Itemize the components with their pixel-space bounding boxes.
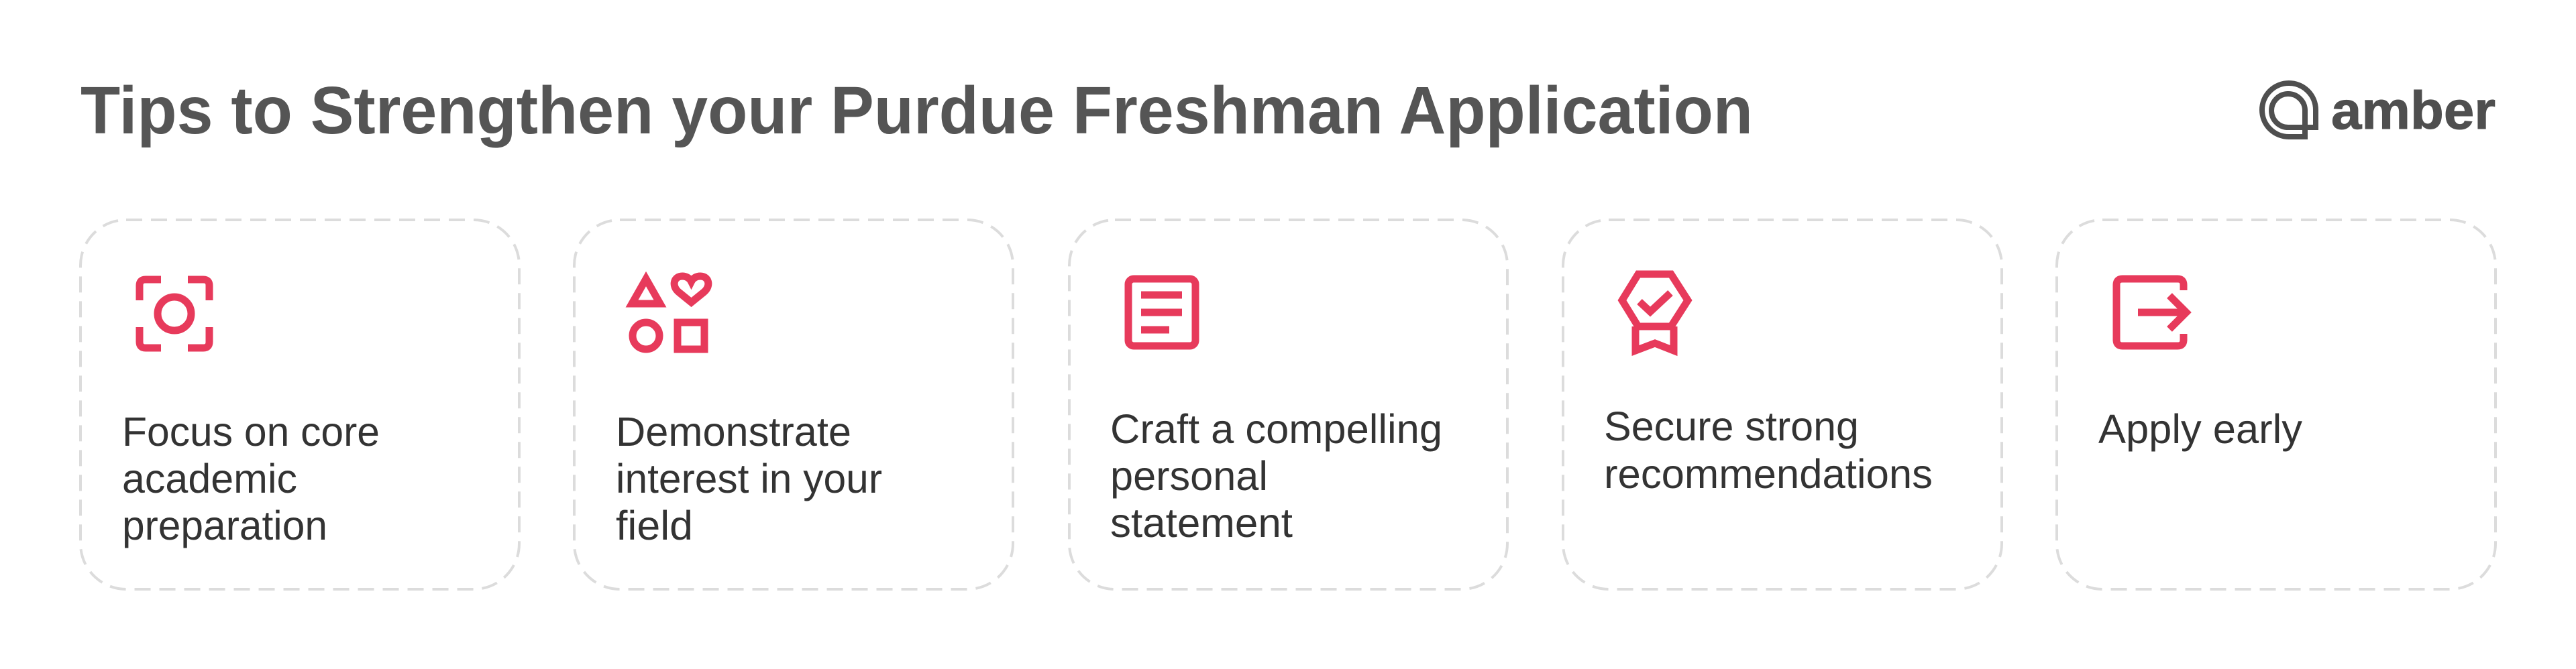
card text: recommendations: [1604, 451, 1933, 497]
card text: Secure strong: [1604, 404, 1859, 449]
icon: award ribbon: [1622, 274, 1688, 351]
card text: preparation: [122, 503, 327, 548]
panel: craft a compelling personal statement: [1069, 220, 1507, 589]
card text: Focus on core: [122, 409, 380, 454]
logo wordmark: amber: [2331, 80, 2496, 140]
icon: focus frame: [140, 280, 209, 348]
icon: document: [1128, 279, 1195, 346]
card text: Demonstrate: [616, 409, 851, 454]
icon: exit arrow: [2116, 279, 2186, 346]
card text: [1604, 404, 1933, 497]
card text: [122, 409, 380, 548]
card text: field: [616, 503, 693, 548]
panel: focus on core academic preparation: [80, 220, 519, 589]
title: Tips to Strengthen your Purdue Freshman Application: [80, 73, 1753, 148]
card text: interest in your: [616, 456, 882, 501]
panel: apply early: [2057, 220, 2496, 589]
card text: Apply early: [2098, 406, 2302, 452]
panel: demonstrate interest in your field: [574, 220, 1013, 589]
card text: personal: [1110, 453, 1268, 499]
card text: statement: [1110, 500, 1293, 546]
logo: amber: [2262, 80, 2496, 140]
panel: secure strong recommendations: [1563, 220, 2002, 589]
icon: shapes: [632, 276, 708, 349]
card text: [1110, 406, 1442, 546]
card text: Craft a compelling: [1110, 406, 1442, 452]
card text: academic: [122, 456, 297, 501]
icon: amber spiral mark: [2262, 83, 2316, 139]
card text: [616, 409, 882, 548]
